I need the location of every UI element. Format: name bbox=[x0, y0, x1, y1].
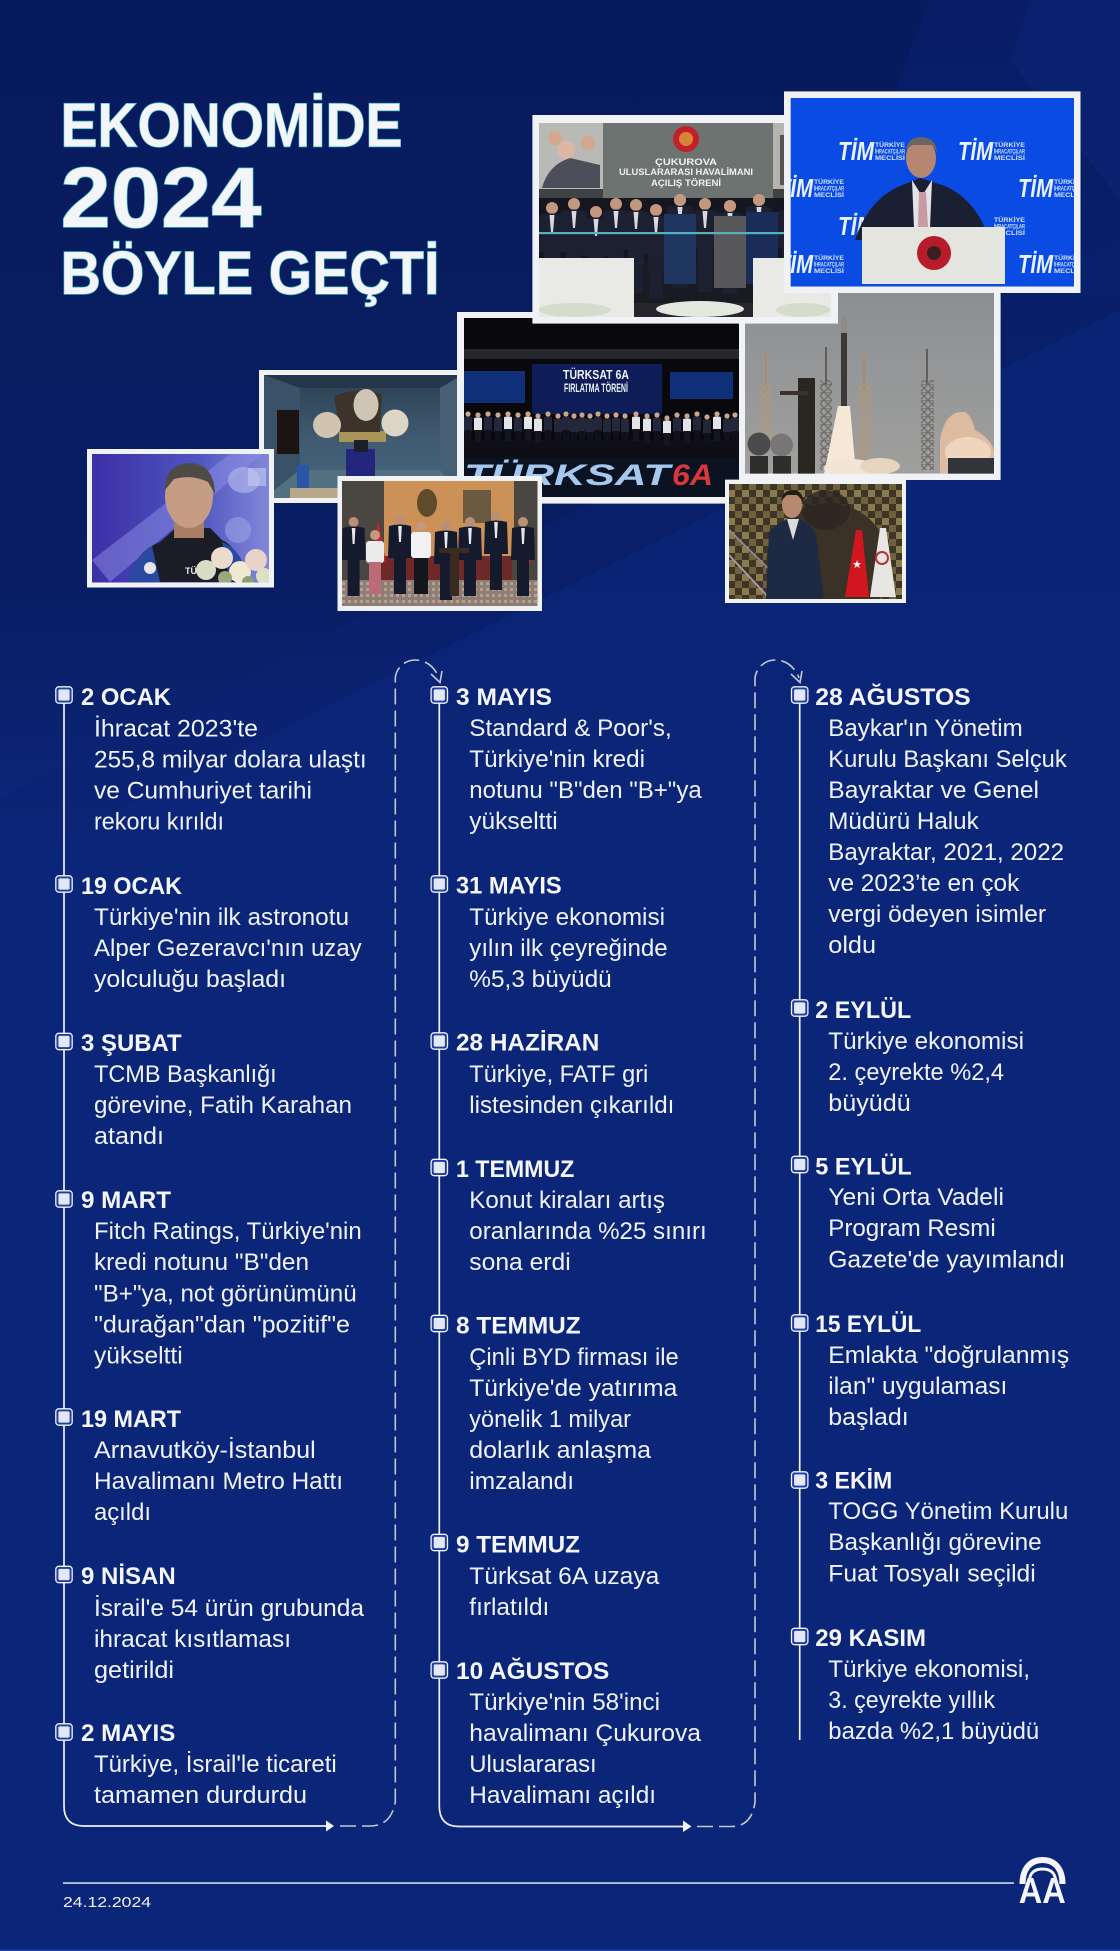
photo: Erdoğan at TİM podium: TÜRKİYE bbox=[875, 140, 906, 149]
date: 8 TEMMUZ bbox=[456, 1312, 581, 1340]
marker bbox=[431, 1534, 448, 1551]
event: 28 HAZİRAN bbox=[431, 1030, 674, 1119]
date: 2 EYLÜL bbox=[815, 997, 911, 1024]
description bbox=[828, 1656, 1039, 1745]
photo: Erdoğan at TİM podium: MECLİSİ bbox=[875, 154, 905, 162]
description bbox=[94, 1751, 337, 1809]
description: Konut kiraları artış bbox=[469, 1187, 665, 1214]
description: TOGG Yönetim Kurulu bbox=[828, 1498, 1068, 1525]
photo: Türksat launch ceremony: 6A bbox=[672, 459, 713, 492]
event: 15 EYLÜL bbox=[792, 1311, 1069, 1431]
description: vergi ödeyen isimler bbox=[828, 901, 1046, 928]
event: 1 TEMMUZ bbox=[431, 1156, 707, 1276]
description: imzalandı bbox=[469, 1468, 574, 1495]
description: kredi notunu "B"den bbox=[94, 1249, 309, 1276]
date: 5 EYLÜL bbox=[815, 1154, 912, 1180]
event: 19 OCAK bbox=[56, 873, 362, 993]
photo: Türksat launch ceremony: TÜRKSAT 6A bbox=[563, 367, 629, 382]
photo: Erdoğan at TİM podium: İHRACATÇILAR bbox=[875, 148, 905, 156]
photo: Erdoğan at TİM podium: TİM bbox=[1018, 249, 1054, 279]
description: Bayraktar ve Genel bbox=[828, 777, 1039, 804]
description: Fitch Ratings, Türkiye'nin bbox=[94, 1218, 362, 1245]
description: Türkiye'de yatırıma bbox=[469, 1375, 678, 1402]
column 1 dashed return bbox=[340, 660, 439, 1826]
photo: Erdoğan at TİM podium: TİM bbox=[838, 136, 875, 166]
date: 9 NİSAN bbox=[81, 1563, 176, 1590]
footer rule bbox=[63, 1882, 1014, 1884]
photo: Fatih Karahan: ★ bbox=[852, 559, 862, 571]
description: sona erdi bbox=[469, 1249, 571, 1276]
description: havalimanı Çukurova bbox=[469, 1720, 702, 1747]
description: TCMB Başkanlığı bbox=[94, 1061, 277, 1088]
marker bbox=[56, 1566, 72, 1583]
photo: Erdoğan at TİM podium: İHRACATÇILAR bbox=[814, 260, 844, 268]
description: listesinden çıkarıldı bbox=[469, 1092, 674, 1119]
date stamp: 24.12.2024 bbox=[63, 1894, 151, 1911]
column 1 solid line bbox=[64, 703, 328, 1826]
description bbox=[828, 1342, 1069, 1431]
marker bbox=[431, 687, 448, 703]
description bbox=[94, 1061, 352, 1150]
arrow: column 2 to next bbox=[683, 1820, 692, 1832]
description: atandı bbox=[94, 1123, 164, 1150]
description bbox=[828, 715, 1068, 959]
photo: Erdoğan at TİM podium: MECLİSİ bbox=[994, 154, 1025, 162]
marker bbox=[56, 1409, 72, 1425]
description: İhracat 2023'te bbox=[94, 716, 258, 742]
photo: Erdoğan at TİM podium: TÜRKİYE bbox=[814, 253, 845, 262]
description: oranlarında %25 sınırı bbox=[469, 1218, 707, 1245]
event: 9 NİSAN bbox=[56, 1563, 365, 1684]
photo: Erdoğan at TİM podium: TÜRKİYE bbox=[994, 215, 1026, 224]
description: ilan" uygulaması bbox=[828, 1373, 1007, 1400]
photo: Erdoğan at TİM podium: TÜRKİYE bbox=[814, 177, 845, 186]
description: Yeni Orta Vadeli bbox=[828, 1184, 1004, 1211]
description: oldu bbox=[828, 932, 876, 959]
date: 28 HAZİRAN bbox=[456, 1030, 599, 1056]
photo: astronaut: TÜ bbox=[185, 566, 197, 576]
description: 3. çeyrekte yıllık bbox=[828, 1687, 996, 1714]
event: 10 AĞUSTOS bbox=[431, 1657, 702, 1809]
description: tamamen durdurdu bbox=[94, 1782, 307, 1809]
date: 9 MART bbox=[81, 1187, 171, 1214]
event: 2 EYLÜL bbox=[792, 997, 1024, 1117]
event: 9 TEMMUZ bbox=[431, 1532, 660, 1621]
marker bbox=[56, 1724, 72, 1740]
description: Baykar'ın Yönetim bbox=[828, 715, 1023, 742]
description: Türkiye'nin 58'inci bbox=[469, 1689, 660, 1716]
marker bbox=[56, 876, 72, 892]
description: Türkiye ekonomisi bbox=[828, 1028, 1024, 1055]
title line 1: EKONOMİDE bbox=[60, 92, 402, 160]
date: 28 AĞUSTOS bbox=[815, 683, 971, 711]
timeline column 1 bbox=[56, 684, 367, 1809]
description: Türkiye, FATF gri bbox=[469, 1061, 648, 1088]
description: başladı bbox=[828, 1404, 909, 1431]
photo: Erdoğan at TİM podium: TİM bbox=[778, 173, 814, 203]
event: 3 MAYIS bbox=[431, 684, 702, 835]
event: 19 MART bbox=[56, 1406, 343, 1526]
description: Çinli BYD firması ile bbox=[469, 1344, 679, 1371]
photo: Erdoğan at TİM podium: TİM bbox=[958, 136, 994, 166]
description: 255,8 milyar dolara ulaştı bbox=[94, 746, 367, 774]
date: 2 MAYIS bbox=[81, 1720, 175, 1747]
photo: Erdoğan at TİM podium: İHRACATÇILAR bbox=[814, 184, 844, 192]
photo: Çukurova airport opening: ULUSLARARASI HAVALİMANI bbox=[619, 167, 753, 178]
photo: Erdoğan at TİM podium: TİM bbox=[838, 211, 875, 241]
description bbox=[828, 1028, 1024, 1117]
footer bbox=[63, 1860, 1066, 1911]
description bbox=[469, 1187, 707, 1276]
photo: satellite in test chamber bbox=[259, 370, 464, 503]
marker bbox=[431, 876, 448, 892]
description: Başkanlığı görevine bbox=[828, 1529, 1042, 1556]
photo: Erdoğan at TİM podium: MECLİSİ bbox=[994, 229, 1025, 237]
description: Fuat Tosyalı seçildi bbox=[828, 1560, 1036, 1588]
description: Türkiye, İsrail'le ticareti bbox=[94, 1751, 337, 1778]
description: Türkiye ekonomisi bbox=[469, 904, 665, 931]
photo: cabinet group at Atatürk bust bbox=[338, 476, 542, 611]
photo: Çukurova airport opening bbox=[532, 115, 838, 324]
description: Kurulu Başkanı Selçuk bbox=[828, 746, 1068, 773]
photo: Falcon 9 rocket launch bbox=[739, 285, 1001, 480]
description: Türksat 6A uzaya bbox=[469, 1563, 660, 1590]
description bbox=[94, 1437, 343, 1526]
marker bbox=[792, 1000, 808, 1016]
arrow: into column 2 bbox=[431, 671, 442, 682]
date: 29 KASIM bbox=[815, 1625, 926, 1652]
description: Uluslararası bbox=[469, 1751, 597, 1778]
description: Havalimanı açıldı bbox=[469, 1782, 656, 1809]
description: yükseltti bbox=[469, 808, 558, 835]
description: Bayraktar, 2021, 2022 bbox=[828, 839, 1064, 866]
marker bbox=[792, 1156, 808, 1173]
description: İsrail'e 54 ürün grubunda bbox=[94, 1595, 365, 1622]
icon: AA logo: AA bbox=[1019, 1870, 1066, 1911]
description: yolculuğu başladı bbox=[94, 966, 286, 993]
description: rekoru kırıldı bbox=[94, 808, 224, 836]
marker bbox=[431, 1033, 448, 1049]
description: açıldı bbox=[94, 1499, 151, 1526]
date: 9 TEMMUZ bbox=[456, 1532, 580, 1558]
description bbox=[94, 1218, 362, 1370]
event: 31 MAYIS bbox=[431, 872, 668, 993]
timeline column 3 bbox=[792, 683, 1069, 1745]
date: 3 MAYIS bbox=[456, 684, 552, 711]
photo: Türksat launch ceremony: TÜRKSAT bbox=[464, 459, 674, 492]
column 2 dashed return bbox=[697, 660, 799, 1826]
timeline connector lines bbox=[64, 660, 802, 1832]
event: 28 AĞUSTOS bbox=[792, 683, 1068, 959]
photo: Erdoğan at TİM podium: TİM bbox=[1018, 173, 1054, 203]
date: 15 EYLÜL bbox=[815, 1311, 921, 1338]
event: 2 MAYIS bbox=[56, 1720, 337, 1809]
marker bbox=[56, 1033, 72, 1050]
column 2 solid line bbox=[439, 703, 688, 1826]
description: Emlakta "doğrulanmış bbox=[828, 1342, 1069, 1369]
description bbox=[469, 715, 702, 835]
photo: Erdoğan at TİM podium: İHRACATÇILAR bbox=[994, 148, 1025, 156]
description: getirildi bbox=[94, 1657, 174, 1684]
marker bbox=[431, 1159, 448, 1176]
description: yükseltti bbox=[94, 1342, 183, 1370]
event: 9 MART bbox=[56, 1187, 362, 1370]
description: Türkiye'nin kredi bbox=[469, 746, 645, 773]
arrow: into column 3 bbox=[791, 671, 802, 682]
date: 31 MAYIS bbox=[456, 872, 562, 900]
description bbox=[94, 716, 367, 836]
photo: Türksat launch ceremony: FIRLATMA TÖRENİ bbox=[564, 380, 628, 395]
marker bbox=[792, 1315, 808, 1331]
description: Program Resmi bbox=[828, 1215, 996, 1242]
description bbox=[469, 1344, 679, 1495]
date: 19 OCAK bbox=[81, 873, 182, 900]
description bbox=[469, 1061, 674, 1119]
description bbox=[94, 1595, 365, 1684]
date: 1 TEMMUZ bbox=[456, 1156, 574, 1183]
photo: Erdoğan at TİM podium: MECLİSİ bbox=[1054, 267, 1084, 275]
date: 2 OCAK bbox=[81, 684, 171, 711]
event: 5 EYLÜL bbox=[792, 1154, 1065, 1274]
photo: Erdoğan at TİM podium: MECLİSİ bbox=[814, 191, 844, 199]
description: bazda %2,1 büyüdü bbox=[828, 1718, 1039, 1745]
description: "B+"ya, not görünümünü bbox=[94, 1280, 357, 1308]
description: 2. çeyrekte %2,4 bbox=[828, 1059, 1004, 1086]
marker bbox=[56, 1191, 72, 1207]
photo: Erdoğan at TİM podium: TÜRKİYE bbox=[994, 140, 1026, 149]
date: 10 AĞUSTOS bbox=[456, 1657, 609, 1685]
description: %5,3 büyüdü bbox=[469, 966, 612, 993]
description: ve 2023’te en çok bbox=[828, 870, 1020, 897]
marker bbox=[792, 1628, 808, 1645]
photo: Erdoğan at TİM podium: MECLİSİ bbox=[814, 267, 844, 275]
description: görevine, Fatih Karahan bbox=[94, 1092, 352, 1119]
photo: Fatih Karahan bbox=[725, 480, 906, 627]
marker bbox=[792, 687, 808, 703]
date: 3 EKİM bbox=[815, 1468, 892, 1494]
photo: Erdoğan at TİM podium: MECLİSİ bbox=[1054, 191, 1084, 199]
photo: Erdoğan at TİM podium: TÜRKİYE bbox=[1054, 177, 1085, 186]
description: Müdürü Haluk bbox=[828, 808, 980, 835]
description: dolarlık anlaşma bbox=[469, 1437, 652, 1464]
description: yönelik 1 milyar bbox=[469, 1406, 631, 1433]
description: fırlatıldı bbox=[469, 1594, 549, 1621]
photo: Erdoğan at TİM podium: TÜRKİYE bbox=[1054, 253, 1085, 262]
description: ihracat kısıtlaması bbox=[94, 1626, 291, 1653]
arrow: column 1 to next bbox=[326, 1820, 334, 1832]
marker bbox=[792, 1472, 808, 1488]
event: 8 TEMMUZ bbox=[431, 1312, 679, 1495]
description: Türkiye ekonomisi, bbox=[828, 1656, 1030, 1683]
event: 3 ŞUBAT bbox=[56, 1030, 352, 1150]
description bbox=[828, 1184, 1065, 1274]
description bbox=[469, 1563, 660, 1621]
event: 2 OCAK bbox=[56, 684, 367, 836]
photo: Çukurova airport opening: AÇILIŞ TÖRENİ bbox=[651, 178, 721, 189]
marker bbox=[431, 1662, 448, 1678]
description: büyüdü bbox=[828, 1090, 911, 1117]
title line 3: BÖYLE GEÇTİ bbox=[60, 239, 440, 307]
description bbox=[94, 904, 362, 993]
photo: Erdoğan at TİM podium: TİM bbox=[778, 249, 814, 279]
description: yılın ilk çeyreğinde bbox=[469, 935, 668, 962]
timeline column 2 bbox=[431, 684, 707, 1809]
description: notunu "B"den "B+"ya bbox=[469, 777, 702, 804]
description: Arnavutköy-İstanbul bbox=[94, 1437, 316, 1464]
title bbox=[60, 92, 440, 307]
date: 19 MART bbox=[81, 1406, 181, 1433]
column 3 solid line bbox=[799, 703, 801, 1740]
date: 3 ŞUBAT bbox=[81, 1030, 182, 1057]
description: Alper Gezeravcı'nın uzay bbox=[94, 935, 362, 962]
description: Standard & Poor's, bbox=[469, 715, 672, 742]
photo: Erdoğan at TİM podium bbox=[778, 91, 1085, 293]
photo: Çukurova airport opening: ÇUKUROVA bbox=[655, 157, 717, 168]
description bbox=[469, 1689, 702, 1809]
description: ve Cumhuriyet tarihi bbox=[94, 778, 312, 804]
description bbox=[828, 1498, 1068, 1588]
title year: 2024 bbox=[60, 151, 262, 246]
event: 29 KASIM bbox=[792, 1625, 1039, 1745]
photo: Erdoğan at TİM podium: İHRACATÇILAR bbox=[994, 222, 1025, 230]
description bbox=[469, 904, 668, 993]
marker bbox=[431, 1315, 448, 1332]
description: Gazete'de yayımlandı bbox=[828, 1246, 1065, 1274]
description: "durağan"dan "pozitif"e bbox=[94, 1312, 350, 1338]
photo: astronaut bbox=[87, 0, 304, 588]
description: Türkiye'nin ilk astronotu bbox=[94, 904, 349, 931]
description: Havalimanı Metro Hattı bbox=[94, 1468, 343, 1495]
event: 3 EKİM bbox=[792, 1468, 1068, 1588]
marker bbox=[56, 687, 72, 703]
photo: Türksat launch ceremony bbox=[457, 312, 745, 504]
